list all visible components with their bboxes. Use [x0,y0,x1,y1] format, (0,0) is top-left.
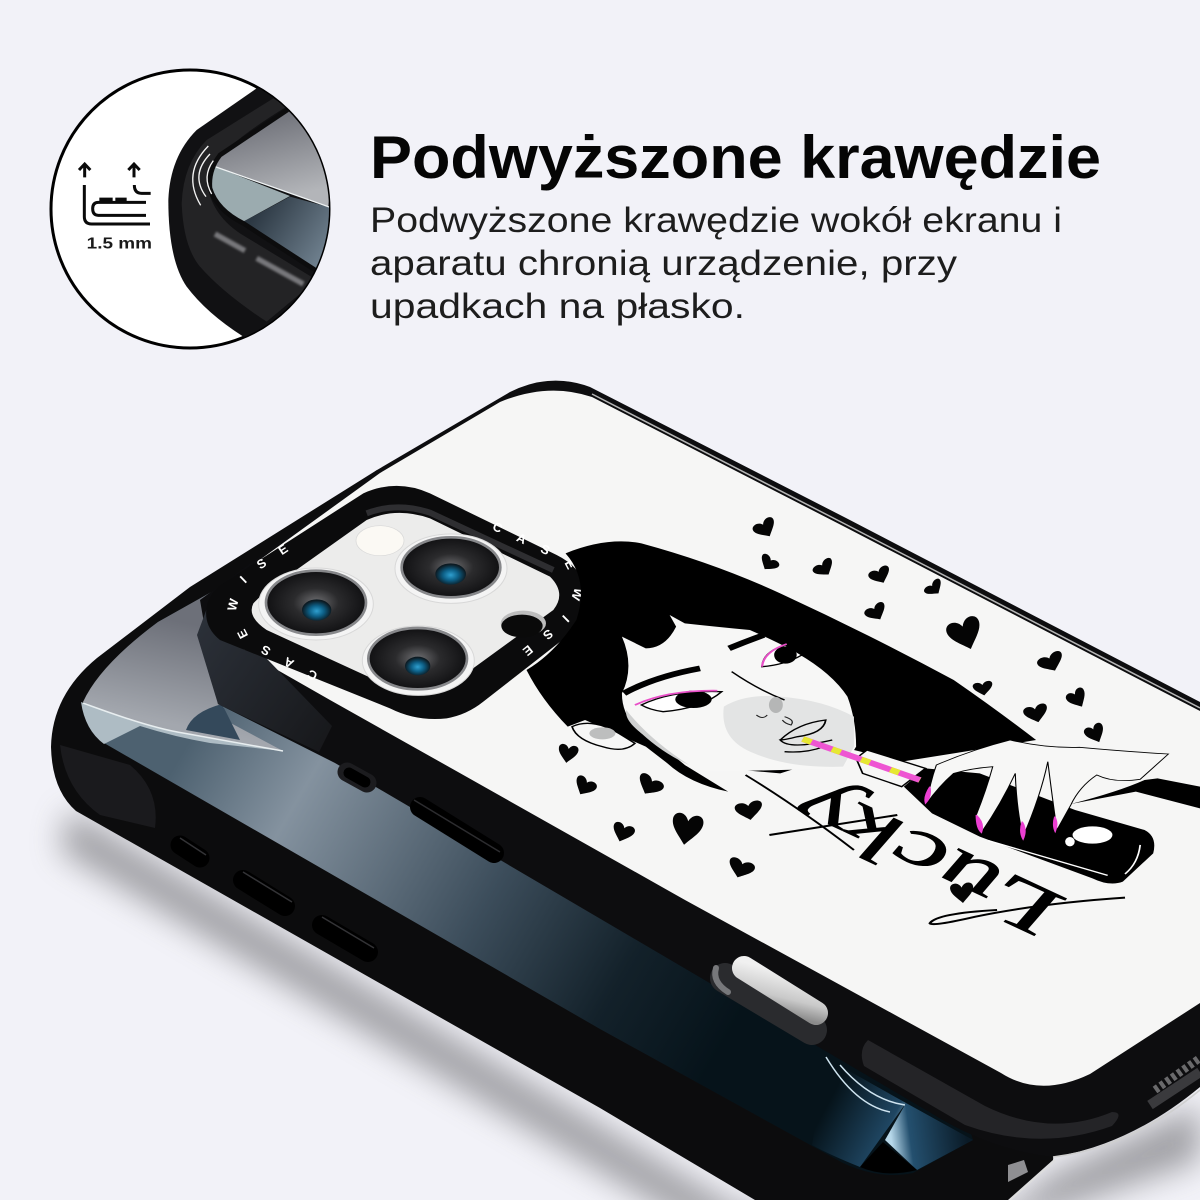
white crescent left of ring [212,590,245,650]
power button [420,807,494,853]
nails [925,787,1057,839]
left eye [641,691,722,712]
hearts pattern [557,516,1108,904]
screen light streaks [826,1057,905,1112]
lower right silver port [1008,1160,1028,1182]
bottle highlight curve [988,841,1140,875]
lower phone corner patch [60,745,156,828]
nose line [732,672,785,700]
power button highlight [414,800,500,852]
inset: raised edge close-up [51,70,340,360]
inset phone crop [168,88,329,337]
inset measurement label: 1.5 mm [87,236,152,253]
screen grey wallpaper area [83,590,283,751]
inset phone body [168,88,329,337]
lower phone frame [51,470,1060,1200]
description line 1: Podwyższone krawędzie wokół ekranu i [370,201,1062,240]
hearts bottom left [557,743,974,904]
mute switch hole [349,773,365,782]
inset highlight streaks [215,234,303,284]
face [622,615,856,772]
handwritten lettering on case: Lucky [784,765,1073,957]
flash [356,526,404,556]
nose grey [769,697,783,713]
inset edge icon [79,164,151,224]
screen blue glow left [812,1058,906,1167]
microphone [501,615,543,637]
neck lines [746,775,854,850]
arrow left [79,164,90,177]
device bumps [99,193,127,207]
hearts top right [751,516,1108,746]
screen blue glow right [885,1103,973,1170]
side button: action [180,845,200,858]
inset inner black edge [210,109,315,270]
description [370,201,1062,326]
white back panel [215,391,1200,1086]
straw yellow stripes [803,739,920,780]
sleeve [1071,778,1200,808]
straw [803,739,920,780]
inset screen dark blue [243,197,333,268]
charging port dark surround [725,978,812,1030]
screen lip line [134,185,151,193]
phone: lower phone with dark frame [51,470,1060,1200]
case outer line [84,185,150,224]
lettering flourish [769,815,1125,924]
nostrils [756,715,792,725]
bottle highlight small [1065,837,1075,846]
ring text upper right: CASEWISE [493,523,581,656]
face left shadow [626,710,689,765]
inner wall highlight [367,507,553,570]
frame inner highlight [592,394,1200,708]
device outline [93,202,146,215]
inset frame lighter band [182,98,317,322]
inset sheet line [215,167,330,207]
bottle body [904,768,1154,884]
illustration: woman with bottle [527,541,1200,924]
left eyebrow [624,668,700,693]
bottom speaker holes [1155,1058,1200,1090]
charging port silver [744,968,816,1013]
lens 3 [362,626,474,695]
mute switch [347,772,367,783]
inset screen grey [216,110,329,206]
speaker recess [1150,1072,1200,1105]
right eyebrow [729,635,764,648]
side button: volume down [322,925,368,952]
description line 3: upadkach na płasko. [370,287,745,326]
screen light sheet [81,702,283,751]
lips [780,720,832,752]
bottle neck [856,750,926,787]
camera bump body [197,600,332,752]
lower right silver edge [1010,1160,1055,1200]
phone: top phone with white back [197,381,1200,1157]
silver edge under corner [1053,1090,1200,1157]
lower phone screen [83,590,973,1175]
bottle highlight large [1073,826,1112,844]
inset screen light [211,167,290,222]
dark blue tab on screen [186,704,240,740]
sheet highlight [83,703,283,751]
corner carbon patch [862,1040,1118,1139]
phone cast shadow [60,810,1200,1200]
left pink liner [635,691,717,705]
camera plate [252,513,559,694]
lens 2 [395,534,507,603]
inset white arcs [193,146,213,205]
hair [527,541,1036,792]
charging port metal end [715,968,728,992]
side button: volume up [243,880,285,906]
microphone hole [501,611,546,636]
left iris [675,691,712,708]
ring text lower left: CASEWISE [227,544,316,680]
camera ring [206,486,585,719]
camera module [206,486,581,719]
face shading [723,696,854,767]
right pink liner [762,644,787,667]
inset circle [51,70,329,348]
lens 1 [259,568,373,640]
inner ear [589,727,615,739]
top phone frame [200,381,1200,1157]
ear [572,723,635,749]
description line 2: aparatu chronią urządzenie, przy [370,244,958,283]
hand [927,740,1168,837]
screen black triangle [860,1142,917,1173]
right eye [762,645,802,667]
arrow right [128,164,140,177]
title: Podwyższone krawędzie [370,124,1101,191]
right iris [774,646,797,664]
side button highlights [180,838,374,948]
